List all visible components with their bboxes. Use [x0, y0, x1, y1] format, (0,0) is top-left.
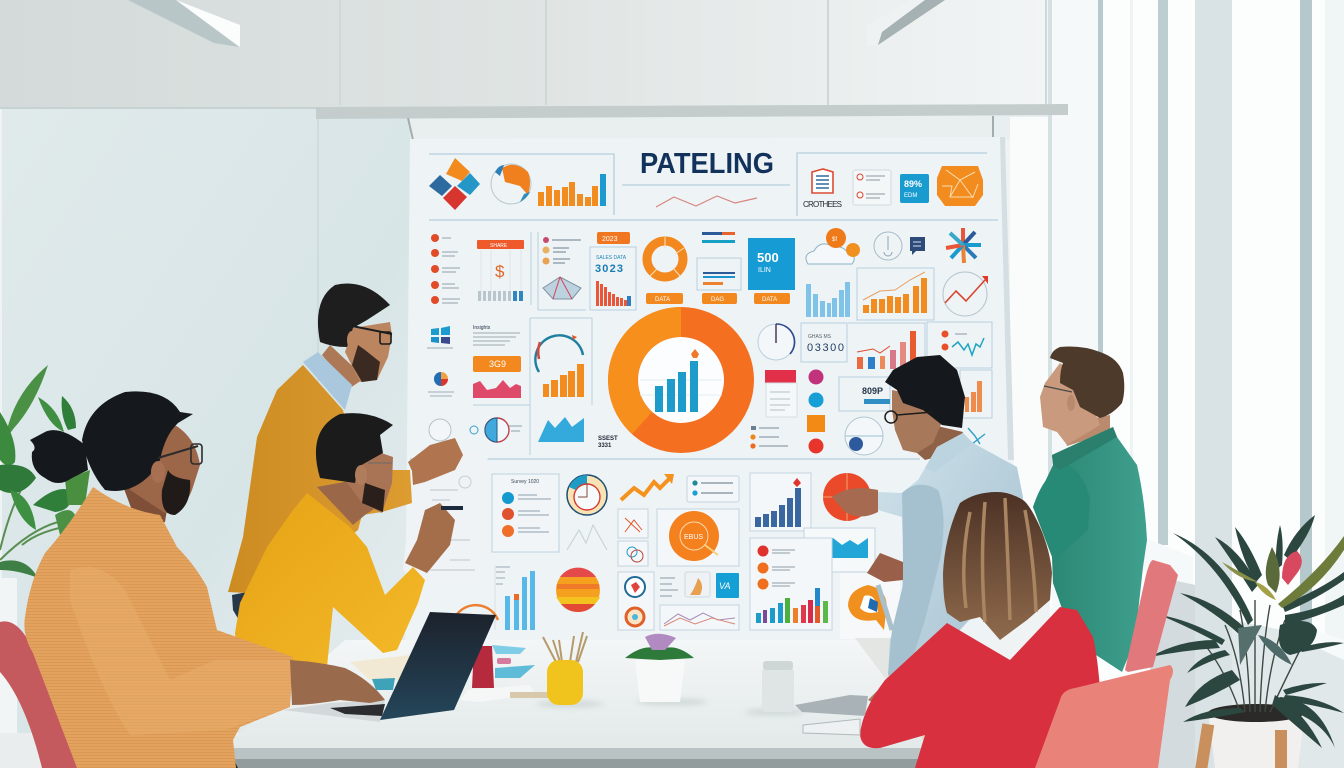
- teal area tile: [804, 528, 875, 572]
- orange growth chart: [863, 272, 927, 313]
- orange tag: [597, 232, 630, 244]
- teal stat tile: EDM: [904, 193, 917, 199]
- text block and orange tag: Insights: [473, 325, 491, 331]
- outline circle and speech icon: [874, 232, 925, 260]
- desk notes behind laptop: [350, 645, 548, 702]
- seated person in orange sweater: [24, 391, 385, 768]
- top bar chart: [538, 174, 606, 206]
- list with icons: [431, 234, 460, 304]
- half circle and outline circle: [429, 418, 522, 442]
- person in red top: [860, 492, 1100, 768]
- windows: [1048, 0, 1344, 768]
- pink area chart: [473, 380, 521, 398]
- clock chart: [758, 324, 795, 360]
- blue 500 tile: 500: [757, 250, 779, 265]
- pinwheel icon: [946, 228, 981, 263]
- small icon tiles: [618, 509, 648, 566]
- left chair: [0, 621, 78, 768]
- table item shadows: [536, 699, 805, 715]
- red dots and teal signal: [942, 330, 984, 355]
- icon list and diamond: [542, 237, 581, 299]
- central donut chart: [608, 307, 754, 453]
- small text label: SSEST: [598, 436, 618, 442]
- 03300 stat: 03300: [807, 342, 844, 354]
- windows logo: [427, 326, 453, 348]
- mug: [762, 661, 794, 712]
- share chart card: $: [495, 262, 505, 281]
- teal scribble: [968, 428, 985, 444]
- small card: [853, 170, 891, 205]
- color circle icon: [428, 372, 454, 396]
- pencil cup: [543, 632, 587, 705]
- blue area chart: [538, 417, 584, 442]
- orange tag: 2023: [602, 236, 618, 243]
- laptop: [283, 612, 496, 722]
- small text label: 3331: [598, 443, 612, 449]
- left plant: [0, 365, 90, 733]
- bottom-left bars: [495, 565, 535, 630]
- trend circle: [943, 272, 988, 316]
- survey card: [492, 474, 559, 552]
- legend tile: [687, 476, 739, 502]
- 809P tile: [862, 386, 890, 404]
- blue 500 tile: [748, 238, 795, 304]
- teal stat tile: [900, 174, 929, 203]
- line chart tiles: DAG: [711, 297, 724, 303]
- blue 500 tile: ILIN: [758, 267, 771, 274]
- title sparkline: [656, 196, 757, 207]
- orange target tile: EBUS: [684, 534, 703, 541]
- rear pink chair: [1125, 560, 1178, 672]
- circle icon tile: [618, 572, 654, 630]
- grey peaks: [567, 525, 607, 550]
- person in green shirt: [1033, 347, 1147, 672]
- hanging rail and wires: [316, 0, 1068, 140]
- globe icon: [491, 164, 531, 204]
- list and multicolor bars: [750, 538, 832, 630]
- 03300 stat: [807, 334, 844, 354]
- 3023 panel: [595, 255, 631, 306]
- line chart tiles: [702, 232, 737, 304]
- 3023 panel: SALES DATA: [596, 255, 627, 261]
- navy bar chart: [750, 473, 811, 531]
- orange network icon: [937, 166, 983, 206]
- ceiling lights: [128, 0, 945, 47]
- table: [222, 638, 960, 768]
- poster board: [405, 137, 1014, 640]
- orange speech bubble: [840, 573, 900, 639]
- document icon and label: [803, 169, 842, 209]
- orange column chart: [965, 381, 982, 412]
- teal stat tile: 89%: [904, 179, 922, 189]
- text block and orange tag: [473, 325, 521, 372]
- small legend: [750, 426, 788, 449]
- circle diagram: [845, 417, 883, 455]
- loose paper sheet: [403, 452, 488, 585]
- 3023 panel: 3023: [595, 263, 623, 275]
- person in light blue shirt: [832, 355, 1023, 768]
- blue 500 tile: DATA: [762, 297, 777, 303]
- vertical icon column: [807, 370, 825, 454]
- light blue bar chart: [806, 282, 850, 317]
- text block and orange tag: 3G9: [489, 359, 506, 369]
- ring chart: [567, 475, 607, 515]
- orange ring chart: DATA: [655, 297, 670, 303]
- survey card: Survey 1020: [511, 479, 539, 485]
- 809P tile: 809P: [862, 386, 883, 396]
- small text and tile row: VA: [719, 581, 731, 591]
- mixed bar chart: [857, 331, 916, 369]
- striped circle: [556, 568, 600, 612]
- line chart tile: [660, 605, 739, 630]
- poster title: PATELING: [640, 148, 774, 180]
- top-left diamond icon: [429, 158, 480, 210]
- seated man in yellow shirt: [235, 413, 463, 668]
- cloud with badges: [806, 228, 860, 264]
- poster frame lines: [410, 153, 998, 459]
- red circle chart: [823, 473, 871, 521]
- 03300 stat: GHAS MS: [808, 334, 832, 340]
- tablet and notebook: [795, 695, 868, 735]
- right plant: [1150, 515, 1344, 768]
- front pink chair: [1035, 665, 1173, 768]
- cloud with badges: $f: [832, 237, 837, 243]
- share chart card: SHARE: [490, 243, 508, 249]
- red header document: [765, 370, 797, 417]
- orange half ring: [452, 605, 498, 626]
- document icon and label: CROTHEES: [803, 200, 842, 209]
- orange ring chart: [646, 237, 684, 304]
- standing man in mustard sweater: [228, 284, 463, 622]
- orange target tile: [657, 509, 739, 566]
- orange zigzag arrow: [621, 474, 674, 500]
- small text and tile row: [660, 572, 739, 598]
- gauge and orange bars: [535, 335, 584, 397]
- share chart card: [477, 240, 524, 301]
- potted succulent: [625, 634, 694, 702]
